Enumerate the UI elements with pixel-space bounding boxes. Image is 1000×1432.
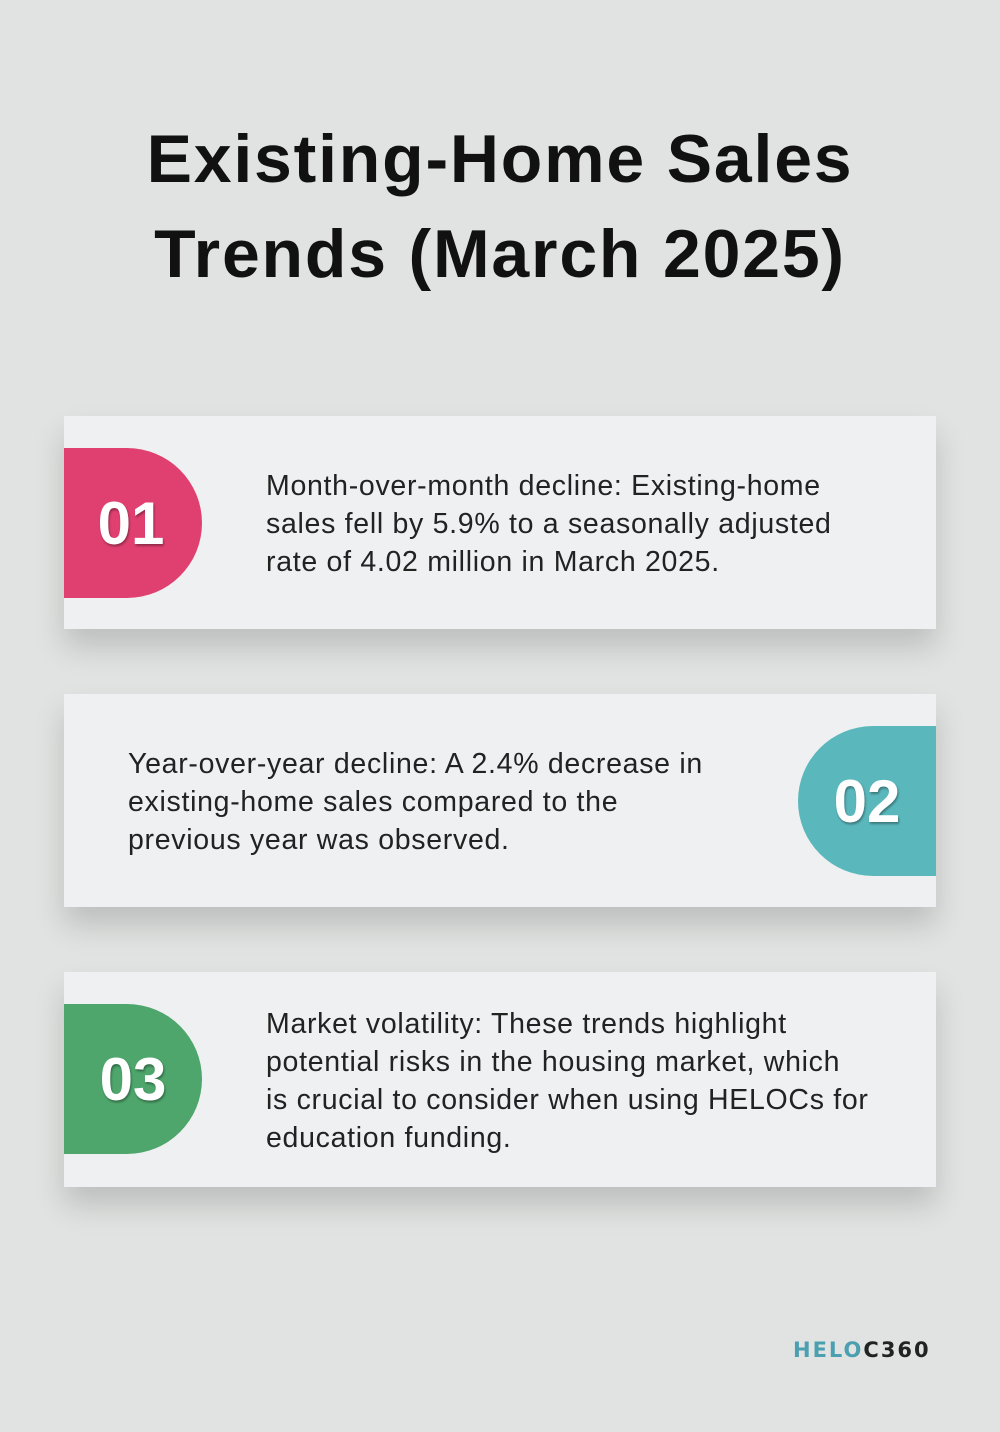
badge 01 [64,448,202,598]
text 01: sales fell by 5.9% to a seasonally adjusted [266,508,832,540]
badge 01: 01 [98,490,164,556]
title: Trends (March 2025) [154,216,846,292]
text 03 [266,1008,869,1154]
badge 03: 03 [100,1046,166,1112]
title [147,121,853,292]
text 01: rate of 4.02 million in March 2025. [266,546,720,578]
badge 03 [64,1004,202,1154]
badge 02: 02 [834,768,900,834]
text 03: potential risks in the housing market, which [266,1046,840,1078]
text 02 [128,748,703,856]
text 01: Month-over-month decline: Existing-home [266,470,821,502]
panel: card 03 [64,972,936,1187]
text 03: is crucial to consider when using HELOCs for [266,1084,869,1116]
text 03: education funding. [266,1122,512,1154]
panel: card 02 [64,694,936,907]
text 03: Market volatility: These trends highlight [266,1008,787,1040]
text 02: previous year was observed. [128,824,510,856]
text 01 [266,470,832,578]
title: Existing-Home Sales [147,121,853,197]
logo: HELOC360 [793,1338,931,1362]
panel: card 01 [64,416,936,629]
text 02: Year-over-year decline: A 2.4% decrease in [128,748,703,780]
badge 02 [798,726,936,876]
text 02: existing-home sales compared to the [128,786,618,818]
